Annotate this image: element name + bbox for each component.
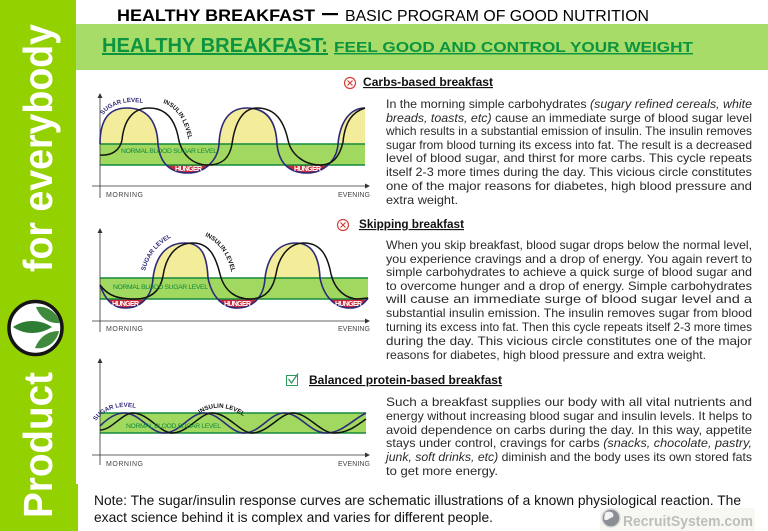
band heading [102, 35, 693, 57]
panel: carbs-based breakfast chart: HUNGER [294, 166, 321, 173]
heading: carbs-based breakfast: Carbs-based breakfast [363, 77, 493, 89]
text block: skipping: substantial insulin emission. The insulin removes sugar from blood [386, 307, 752, 320]
text block: carbs-based: which results in a substantial emission of insulin. The insulin removes [385, 125, 752, 138]
panel: carbs-based breakfast chart: INSULIN LEVEL [163, 99, 192, 140]
panel: skipping breakfast chart: HUNGER [335, 301, 362, 308]
text block: skipping: reasons for diabetes, high blood pressure and extra weight. [386, 349, 706, 362]
panel: balanced breakfast chart: MORNING [106, 461, 143, 468]
panel: skipping breakfast chart: INSULIN LEVEL [205, 232, 235, 272]
panel: balanced breakfast chart: NORMAL BLOOD SUGAR LEVEL [126, 423, 221, 430]
panel: skipping breakfast chart [92, 228, 370, 333]
panel: skipping breakfast chart: MORNING [106, 326, 143, 333]
panel: skipping breakfast chart: SUGAR LEVEL [141, 234, 172, 270]
watermark [600, 508, 755, 531]
sidebar [0, 0, 78, 531]
text block: skipping: turning its excess into fat. Then this cycle repeats itself 2-3 more times [386, 321, 752, 334]
text block: skipping: will cause an immediate surge of blood sugar level and a [385, 293, 753, 306]
note: exact science behind it is complex and varies for different people. [94, 509, 493, 525]
text block: skipping: during the day. This vicious circle constitutes one of the major [386, 335, 752, 348]
text block: skipping [385, 239, 753, 362]
band heading: FEEL GOOD AND CONTROL YOUR WEIGHT [334, 40, 693, 56]
text block: carbs-based: level of blood sugar, and thirst for more carbs. This cycle repeats [386, 152, 752, 165]
sidebar text: for everybody: for everybody [15, 24, 61, 272]
text block: skipping: you experience cravings and a drop of energy. You again revert to [386, 253, 752, 266]
text block: carbs-based: In the morning simple carbohydrates (sugary refined cereals, white [386, 98, 753, 111]
note [94, 492, 741, 525]
panel: skipping breakfast chart: HUNGER [112, 301, 139, 308]
panel: balanced breakfast chart: EVENING [338, 461, 370, 468]
panel: skipping breakfast chart: NORMAL BLOOD SUGAR LEVEL [113, 284, 208, 291]
text block: carbs-based: sugar from blood turning its excess into fat. The result is a decreased [386, 139, 752, 152]
panel: carbs-based breakfast chart [92, 93, 370, 199]
heading: balanced protein-based breakfast: Balanced protein-based breakfast [309, 375, 502, 387]
text block: balanced: to get more energy. [386, 465, 498, 478]
text block: carbs-based: breads, toasts, etc) cause an immediate surge of blood sugar level [386, 112, 752, 125]
header band [76, 24, 768, 70]
text block: carbs-based: extra weight. [386, 194, 458, 207]
band heading: HEALTHY BREAKFAST: [102, 35, 328, 57]
text block: balanced: stays under control, cravings for carbs (snacks, chocolate, pastry, [386, 437, 752, 450]
text block: balanced: Such a breakfast supplies our body with all vital nutrients and [386, 396, 752, 409]
panel: balanced breakfast chart [92, 358, 370, 468]
text block: skipping: When you skip breakfast, blood sugar drops below the normal level, [386, 239, 752, 252]
text block: carbs-based: itself 2-3 more times during the day. This vicious circle constitutes [386, 166, 752, 179]
panel: carbs-based breakfast chart: EVENING [338, 192, 370, 199]
sidebar text: Product: Product [15, 372, 61, 518]
panel: carbs-based breakfast chart: MORNING [106, 192, 143, 199]
text block: carbs-based [385, 98, 753, 207]
icon: red cross carbs [344, 78, 356, 88]
icon: red cross skipping [338, 220, 348, 230]
text block: balanced: junk, soft drinks, etc) diminish and the body uses its own stored fats [384, 451, 752, 464]
panel: skipping breakfast chart: HUNGER [224, 301, 251, 308]
text block: balanced [384, 396, 752, 478]
icon: leaf logo [9, 302, 62, 354]
panel: skipping breakfast chart: EVENING [338, 326, 370, 333]
text block: carbs-based: one of the major reasons for diabetes, high blood pressure and [386, 180, 752, 193]
top title [117, 6, 649, 25]
heading: skipping breakfast: Skipping breakfast [359, 219, 464, 231]
text block: skipping: to overcome hunger and a drop of energy. Simple carbohydrates [386, 280, 752, 293]
note: Note: The sugar/insulin response curves are schematic illustrations of a known physiological reaction. The [94, 492, 741, 508]
panel: carbs-based breakfast chart: NORMAL BLOOD SUGAR LEVEL [121, 148, 217, 155]
text block: skipping: simple carbohydrates to achieve a quick surge of blood sugar and [386, 266, 752, 279]
icon: green check [286, 374, 298, 386]
panel: balanced breakfast chart: SUGAR LEVEL [93, 402, 136, 420]
panel: carbs-based breakfast chart: SUGAR LEVEL [100, 98, 143, 114]
top title: BASIC PROGRAM OF GOOD NUTRITION [345, 8, 649, 25]
panel: carbs-based breakfast chart: HUNGER [175, 166, 202, 173]
watermark: RecruitSystem.com [623, 514, 753, 530]
top title: HEALTHY BREAKFAST [117, 6, 316, 25]
panel: balanced breakfast chart: INSULIN LEVEL [198, 403, 244, 416]
text block: balanced: avoid dependence on carbs during the day. In this way, appetite [386, 424, 752, 437]
text block: balanced: energy without increasing blood sugar and insulin levels. It helps to [386, 410, 752, 423]
